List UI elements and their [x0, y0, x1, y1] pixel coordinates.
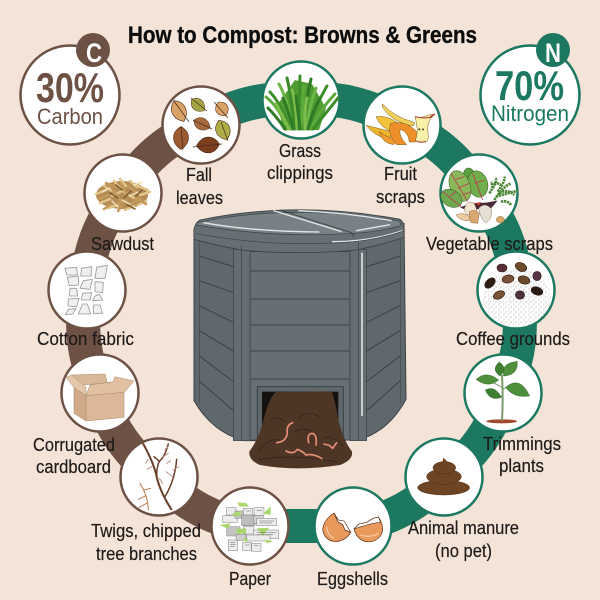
label: trimmings plants: plants	[499, 456, 544, 476]
label: twigs, chipped tree branches: Twigs, chipped	[91, 521, 201, 541]
icon: grass clippings	[262, 62, 340, 138]
icon: eggshells	[314, 488, 392, 564]
panel: carbon 30%: C	[86, 38, 102, 68]
label: fall leaves: Fall	[186, 165, 212, 185]
label: grass clippings	[267, 141, 333, 183]
icon: fruit scraps	[364, 86, 440, 164]
icon: twigs	[120, 438, 198, 516]
panel: nitrogen 70%: 70%	[495, 62, 564, 109]
bin lid	[194, 210, 404, 253]
icon: animal manure	[406, 438, 482, 516]
icon: vegetable scraps	[437, 154, 518, 232]
panel: nitrogen 70%: Nitrogen	[491, 101, 569, 126]
label: grass clippings: clippings	[267, 163, 333, 183]
icon: coffee grounds	[478, 252, 554, 328]
panel: carbon 30%: Carbon	[37, 104, 103, 129]
label: corrugated cardboard: Corrugated	[33, 435, 115, 455]
compost bin	[194, 210, 406, 468]
panel: carbon 30%	[20, 33, 120, 144]
label: vegetable scraps: Vegetable scraps	[426, 234, 553, 254]
label: fruit scraps	[376, 164, 425, 207]
label: fall leaves	[176, 165, 223, 208]
label: grass clippings: Grass	[279, 141, 321, 161]
panel: carbon 30%: 30%	[36, 64, 104, 111]
label: fall leaves: leaves	[176, 188, 223, 208]
icon: paper	[212, 488, 288, 564]
label: animal manure	[408, 518, 519, 561]
label: cotton fabric: Cotton fabric	[37, 329, 134, 349]
panel: nitrogen 70%	[480, 33, 580, 144]
icon: sawdust	[84, 154, 162, 232]
label: twigs, chipped tree branches: tree branches	[96, 544, 197, 564]
bin opening	[257, 387, 343, 441]
label: paper: Paper	[229, 569, 271, 589]
label: animal manure: Animal manure	[408, 518, 519, 538]
icon: fall leaves	[162, 86, 240, 164]
label: animal manure: (no pet)	[435, 541, 492, 561]
label: trimmings plants	[483, 434, 561, 476]
label: fruit scraps: scraps	[376, 187, 425, 207]
brown ring segment	[83, 125, 250, 526]
label: corrugated cardboard	[33, 435, 115, 477]
bin front panel	[199, 238, 401, 441]
label: corrugated cardboard: cardboard	[36, 457, 111, 477]
panel: nitrogen 70%: N	[545, 38, 561, 68]
label: sawdust: Sawdust	[91, 234, 154, 254]
label: trimmings plants: Trimmings	[483, 434, 561, 454]
label: twigs, chipped tree branches	[91, 521, 201, 564]
title: How to Compost: Browns & Greens	[128, 22, 477, 49]
icon: cotton fabric	[48, 252, 126, 328]
label: eggshells: Eggshells	[317, 569, 388, 589]
green ring segment	[201, 99, 520, 526]
bin body	[194, 223, 406, 441]
icon: corrugated cardboard box	[62, 354, 138, 432]
icon: trimmings plants	[464, 354, 542, 432]
label: fruit scraps: Fruit	[384, 164, 417, 184]
compost pile with worms	[249, 391, 352, 468]
label: coffee grounds: Coffee grounds	[456, 329, 570, 349]
